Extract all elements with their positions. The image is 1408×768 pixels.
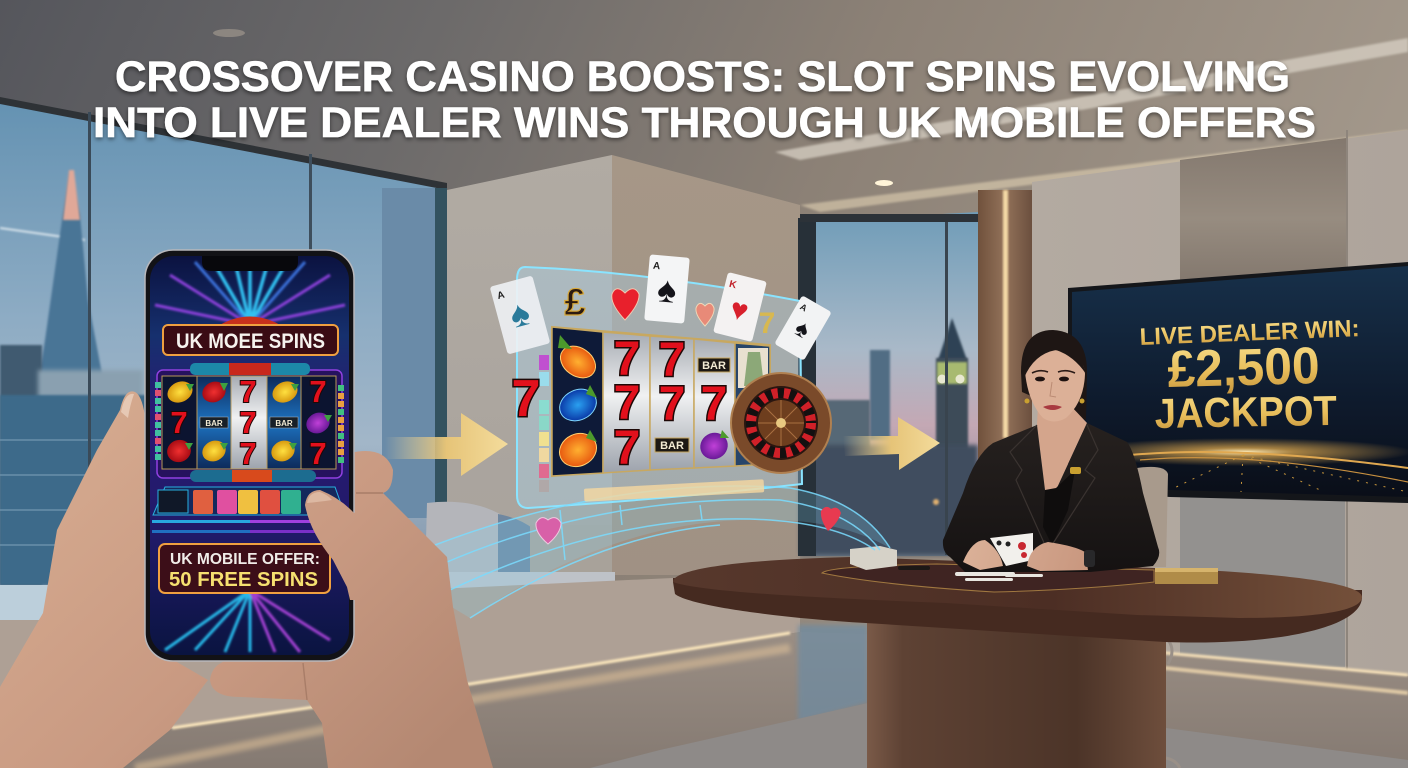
playing cards: [490, 254, 832, 361]
TV text: jackpot message: [1139, 315, 1360, 437]
phone notch: [202, 256, 298, 271]
sevens: 7: [701, 378, 727, 431]
playing cards: A: [652, 261, 661, 272]
playing cards: ♠: [790, 314, 815, 344]
right wall panels: [1032, 130, 1408, 676]
floor with LED strips: [0, 625, 1408, 768]
light arc band: [435, 486, 890, 618]
chair: [1137, 467, 1180, 768]
BAR labels: BAR: [702, 360, 726, 372]
blazer: [943, 423, 1159, 572]
TV text: jackpot message: £2,500: [1167, 337, 1320, 399]
title: INTO LIVE DEALER WINS THROUGH UK MOBILE OFFERS: [93, 99, 1316, 147]
slot machine: [157, 363, 342, 482]
sevens: 7: [170, 405, 188, 440]
spins banner: UK MOEE SPINS: [176, 330, 325, 353]
reel side chips: [158, 382, 341, 465]
fruit symbols: [554, 335, 733, 473]
sevens: [170, 374, 327, 471]
hologram frame: [517, 267, 802, 508]
fingernail: [121, 394, 134, 418]
sevens: 7: [614, 377, 640, 430]
thumb over phone: [305, 490, 398, 600]
live dealer TV screen: [1068, 262, 1408, 503]
mobile offer box: 50 FREE SPINS: [169, 569, 318, 591]
BAR labels: [655, 358, 730, 452]
wood column with LED: [978, 190, 1032, 630]
felt layout: [822, 564, 1154, 592]
slot reels: [552, 327, 770, 476]
window reflection on floor: [798, 625, 868, 722]
sevens: [614, 333, 727, 475]
window seat: [415, 502, 615, 590]
roulette wheel: [731, 373, 831, 473]
hands holding cards: [963, 533, 1095, 571]
screen light rays: [155, 262, 345, 652]
floating symbols: [536, 282, 841, 544]
sevens: 7: [309, 436, 327, 471]
card shoe: [850, 546, 897, 570]
title: CROSSOVER CASINO BOOSTS: SLOT SPINS EVOLVING: [115, 53, 1290, 101]
mobile offer box: UK MOBILE OFFER:: [170, 551, 320, 568]
sevens: 7: [659, 334, 685, 387]
sevens: 7: [239, 436, 257, 471]
ceiling lights: [213, 29, 1408, 212]
left window with skyline: [0, 97, 447, 621]
playing cards: ♥: [727, 292, 752, 329]
dealer: [943, 330, 1159, 572]
sevens: 7: [659, 378, 685, 431]
spins banner: [163, 325, 338, 355]
playing cards: A: [798, 302, 809, 314]
phone: [145, 250, 354, 661]
light arcs: [435, 486, 890, 618]
arrow: slots to hologram: [385, 413, 508, 476]
red dome: [218, 316, 282, 326]
sevens: 7: [239, 374, 257, 409]
floating symbols: £: [564, 282, 586, 324]
floating seven: 7: [512, 370, 540, 428]
gold box: [1155, 568, 1218, 584]
TV text: jackpot message: JACKPOT: [1154, 387, 1337, 437]
hologram slot panel: [435, 254, 890, 618]
arrow: hologram to dealer: [843, 417, 940, 470]
fruit: [164, 377, 333, 465]
floating symbols: 7: [759, 307, 775, 340]
BAR labels: [200, 417, 298, 428]
rug: [590, 703, 1408, 768]
playing cards: K: [728, 279, 738, 291]
right hand behind phone: [210, 451, 493, 768]
neck and chest: [1037, 405, 1087, 490]
BAR labels: BAR: [205, 419, 223, 428]
king card: [738, 348, 768, 388]
BAR labels: BAR: [275, 419, 293, 428]
lower wall: [0, 572, 800, 768]
mobile offer box: [159, 544, 330, 593]
playing cards: A: [496, 290, 506, 302]
table edge: [673, 578, 1362, 643]
sevens: 7: [309, 374, 327, 409]
left hand behind phone: [0, 391, 208, 768]
dealt cards: [955, 572, 1043, 581]
TV text: jackpot message: LIVE DEALER WIN:: [1139, 315, 1360, 351]
playing cards: ♠: [656, 268, 678, 311]
right window with skyline: [798, 212, 978, 556]
table top: [673, 557, 1362, 618]
BAR labels: BAR: [660, 440, 684, 452]
playing cards: ♠: [505, 291, 534, 336]
centre wall block: [447, 155, 800, 580]
symbol bar: [584, 479, 764, 502]
sevens: 7: [614, 333, 640, 386]
eyes and brows: [1032, 371, 1075, 373]
face: [1025, 350, 1085, 422]
sevens: 7: [614, 422, 640, 475]
hair back: [1021, 330, 1087, 420]
side chips: [539, 355, 549, 492]
control buttons: [152, 487, 345, 533]
table: [673, 546, 1362, 768]
title: [93, 53, 1316, 147]
sevens: 7: [239, 405, 257, 440]
